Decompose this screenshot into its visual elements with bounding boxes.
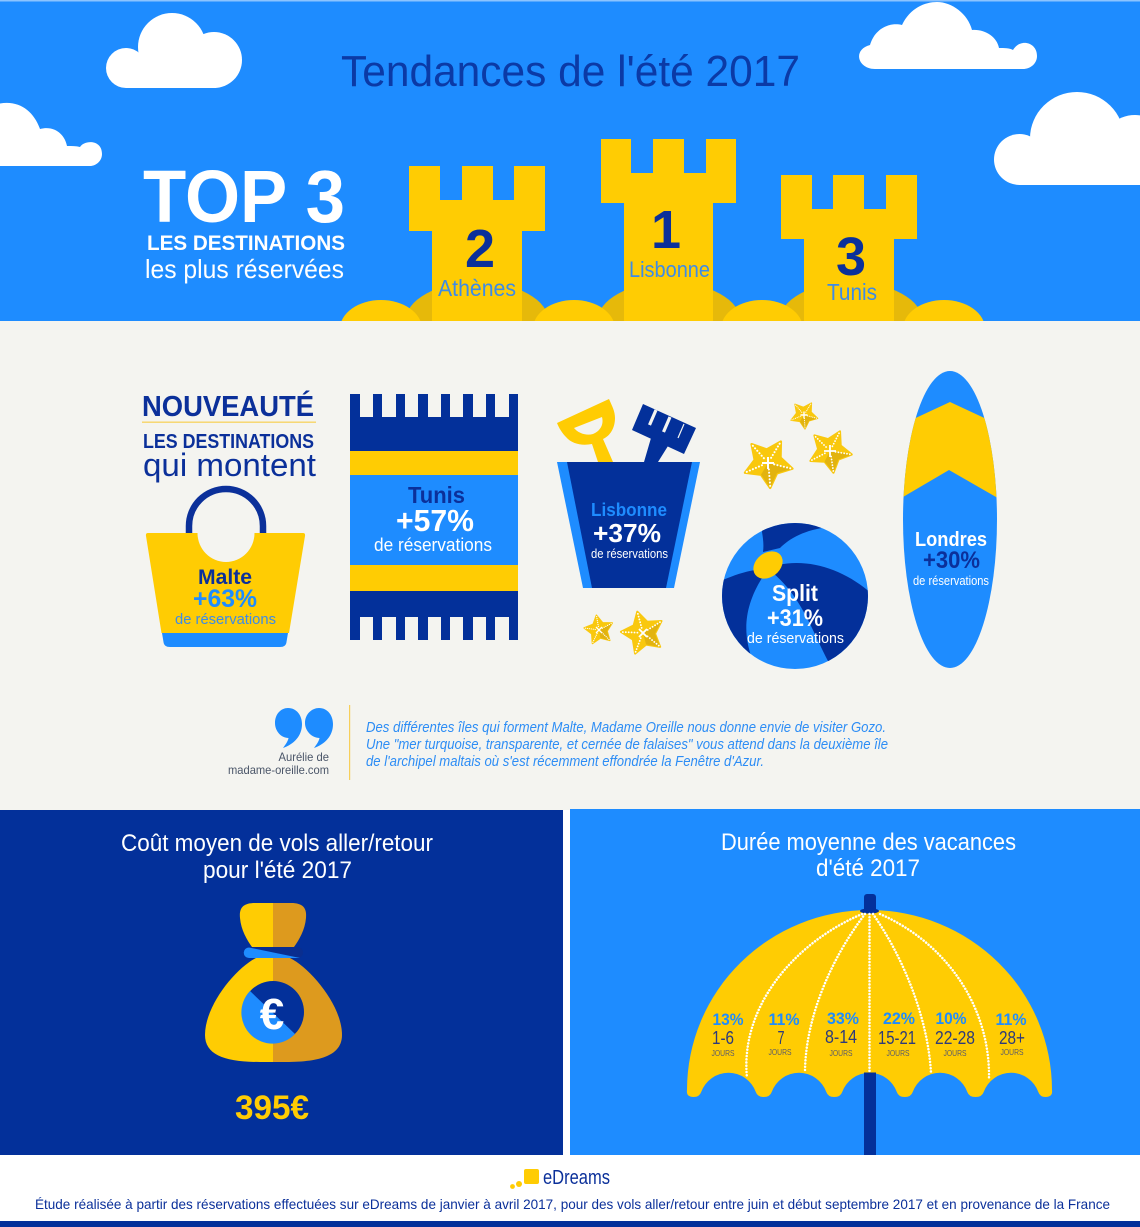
umbrella labels: 11% <box>996 1010 1026 1029</box>
icon: cloud top right <box>859 2 1037 69</box>
umbrella labels <box>712 1009 1026 1058</box>
panel: average holiday duration <box>570 809 1140 1155</box>
icon: starfish group lower <box>582 606 668 656</box>
heading: top 3: TOP 3 <box>143 155 345 238</box>
icon: beach bag Malte <box>146 489 305 647</box>
heading: nouveauté: qui montent <box>143 447 316 483</box>
heading: nouveauté: NOUVEAUTÉ <box>142 389 314 423</box>
sand tower 1: Lisbonne <box>601 139 736 321</box>
umbrella labels: JOURS <box>830 1048 853 1058</box>
umbrella labels: 1-6 <box>712 1028 734 1048</box>
umbrella labels: 13% <box>712 1010 744 1029</box>
heading: holiday duration: Durée moyenne des vacances <box>721 829 1016 856</box>
footer note: Étude réalisée à partir des réservations effectuées sur eDreams de janvier à avril 2017, pour des vols aller/retour entre juin et début septembre 2017 et en provenance de la France <box>35 1196 1110 1212</box>
sand tower 1: Lisbonne: 1 <box>651 200 681 260</box>
icon: beach towel Tunis: +57% <box>396 503 474 538</box>
umbrella labels: 8-14 <box>825 1027 857 1047</box>
umbrella labels: 22-28 <box>935 1028 975 1048</box>
heading: nouveauté <box>142 389 316 483</box>
icon: surfboard Londres: de réservations <box>913 574 989 588</box>
heading: top 3: les plus réservées <box>145 254 344 284</box>
icon: umbrella chart <box>687 894 1052 1155</box>
logo: eDreams <box>510 1167 610 1189</box>
sand tower 3: Tunis: Tunis <box>827 279 877 305</box>
umbrella labels: 11% <box>768 1010 800 1029</box>
heading: flight cost <box>121 830 433 884</box>
quote author <box>228 750 329 777</box>
icon: beach towel Tunis: de réservations <box>374 535 492 555</box>
icon: money bag <box>205 903 342 1062</box>
heading: nouveauté: LES DESTINATIONS <box>143 431 314 453</box>
icon: cloud top left <box>106 13 242 88</box>
icon: surfboard Londres: Londres <box>915 529 987 551</box>
umbrella labels: JOURS <box>768 1047 792 1057</box>
umbrella labels: 33% <box>827 1009 859 1028</box>
front sand mounds <box>342 300 984 321</box>
heading: holiday duration: d'été 2017 <box>816 855 920 882</box>
heading: flight cost: Coût moyen de vols aller/retour <box>121 830 433 857</box>
quote text <box>366 720 888 770</box>
sand mounds <box>410 290 918 321</box>
umbrella labels: 10% <box>936 1009 966 1028</box>
umbrella labels: 7 <box>778 1028 784 1048</box>
umbrella labels: JOURS <box>886 1048 910 1058</box>
sand tower 2: Athènes: Athènes <box>438 275 516 301</box>
panel: average flight cost <box>0 810 563 1155</box>
umbrella labels: 15-21 <box>878 1028 916 1048</box>
quote text: Une "mer turquoise, transparente, et cernée de falaises" vous attend dans la deuxième île <box>366 737 888 753</box>
sand tower 1: Lisbonne: Lisbonne <box>629 257 710 282</box>
icon: beach towel Tunis: Tunis <box>408 482 465 508</box>
icon: beach ball Split: de réservations <box>747 630 844 647</box>
quote block <box>228 705 888 780</box>
icon: bucket and spade Lisbonne: de réservations <box>591 547 668 561</box>
quote text: Des différentes îles qui forment Malte, Madame Oreille nous donne envie de visiter Gozo. <box>366 720 886 736</box>
icon: beach ball Split: +31% <box>767 605 823 632</box>
panel: top 3 destinations <box>0 0 1140 321</box>
umbrella labels: JOURS <box>712 1048 735 1058</box>
sand tower 3: Tunis: 3 <box>836 227 866 287</box>
icon: quotation marks <box>275 708 333 748</box>
icon: beach ball Split <box>722 523 868 669</box>
umbrella labels: JOURS <box>944 1048 967 1058</box>
title: Tendances de l'été 2017 <box>341 47 800 96</box>
icon: beach towel Tunis <box>350 394 518 640</box>
icon: surfboard Londres <box>903 371 997 668</box>
icon: beach bag Malte: de réservations <box>175 611 276 628</box>
heading: flight cost: pour l'été 2017 <box>203 857 352 884</box>
sand tower 2: Athènes <box>409 166 545 321</box>
umbrella labels: JOURS <box>1000 1047 1024 1057</box>
footer bar <box>0 1221 1140 1227</box>
icon: bucket and spade Lisbonne <box>557 399 700 588</box>
sand tower 2: Athènes: 2 <box>465 219 495 279</box>
umbrella labels: 28+ <box>999 1028 1025 1048</box>
heading: top 3 <box>143 155 345 284</box>
icon: bucket and spade Lisbonne: +37% <box>593 518 661 548</box>
panel: rising destinations <box>0 321 1140 810</box>
logo: eDreams: eDreams <box>543 1167 610 1189</box>
heading: top 3: LES DESTINATIONS <box>147 232 345 255</box>
icon: money bag: € <box>260 990 284 1039</box>
quote author: madame-oreille.com <box>228 763 329 777</box>
quote author: Aurélie de <box>278 750 329 764</box>
icon: beach ball Split: Split <box>772 580 818 606</box>
heading: holiday duration <box>721 829 1016 882</box>
flight cost value: 395€ <box>235 1089 309 1127</box>
icon: beach bag Malte: +63% <box>193 585 257 613</box>
quote text: de l'archipel maltais où s'est récemment effondrée la Fenêtre d'Azur. <box>366 754 764 770</box>
icon: starfish group upper <box>737 396 859 493</box>
sand tower 3: Tunis <box>781 175 917 321</box>
icon: cloud left <box>0 103 102 166</box>
umbrella labels: 22% <box>883 1009 915 1028</box>
icon: surfboard Londres: +30% <box>923 547 980 574</box>
icon: bucket and spade Lisbonne: Lisbonne <box>591 500 667 520</box>
icon: beach bag Malte: Malte <box>198 566 252 589</box>
icon: cloud right <box>994 92 1140 185</box>
